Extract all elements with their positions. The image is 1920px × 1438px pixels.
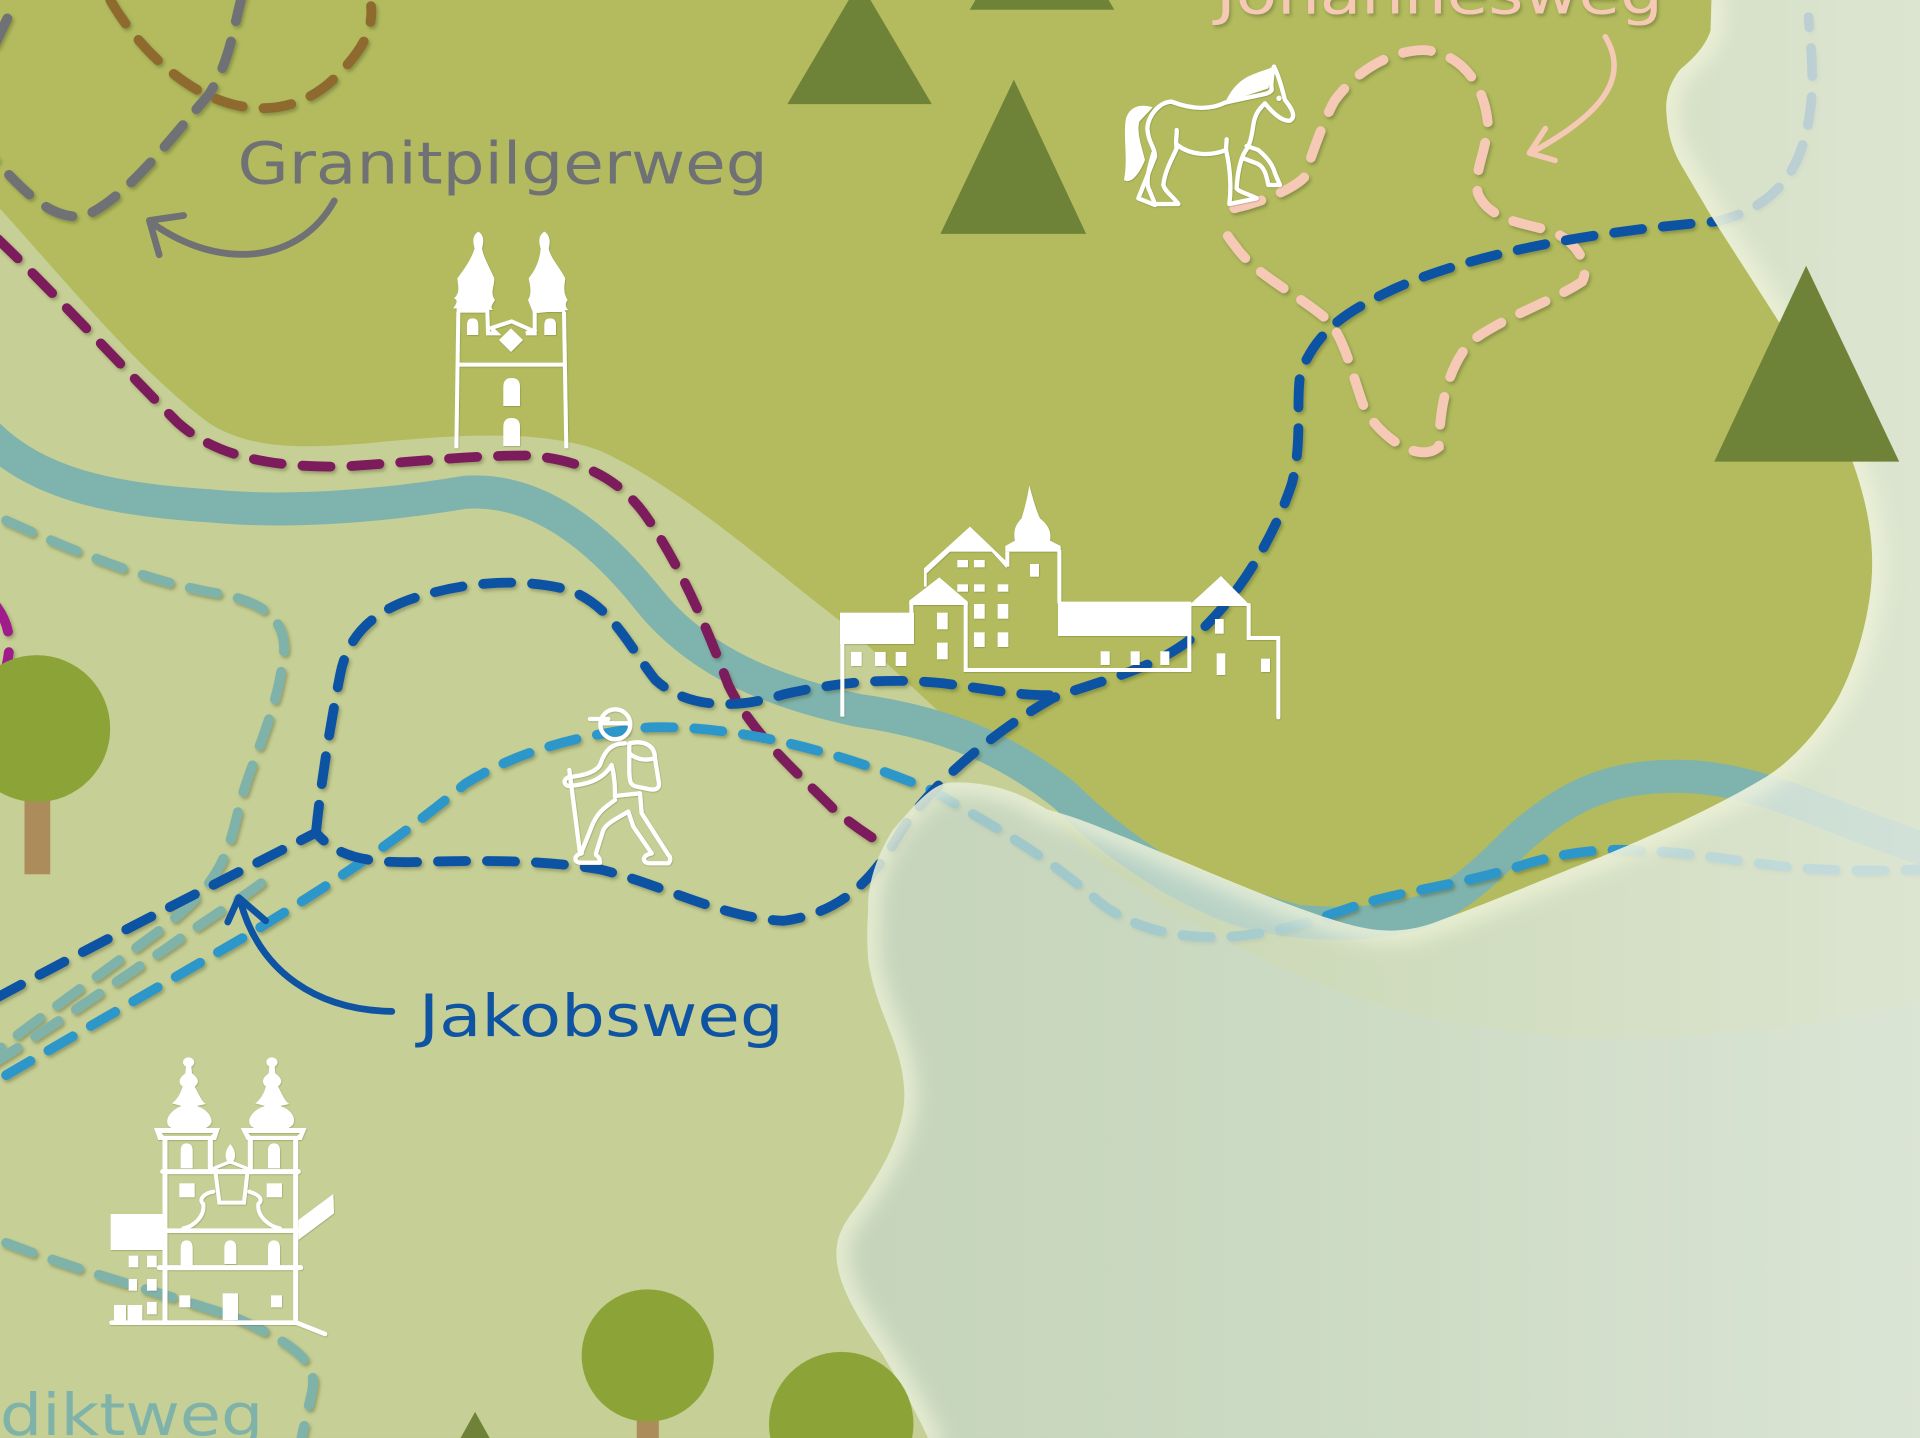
tree: left xyxy=(0,655,110,874)
dark green upland area xyxy=(0,0,1886,941)
label: Jakobsweg: Jakobsweg xyxy=(415,983,784,1050)
tree: bottom centre xyxy=(582,1289,714,1438)
trail: light blue xyxy=(6,727,1920,1075)
backpack xyxy=(629,742,659,790)
conifers xyxy=(457,0,1899,1438)
icon: horse xyxy=(1124,66,1293,205)
fog overlay right side xyxy=(836,0,1920,1438)
tower body xyxy=(456,310,566,448)
trail: Benediktweg (sage) xyxy=(0,520,313,1438)
icon: castle xyxy=(840,485,1278,717)
right cupola xyxy=(249,1057,294,1129)
left spire xyxy=(453,232,495,310)
abbey windows xyxy=(181,1143,193,1168)
label: Granitpilgerweg: Granitpilgerweg xyxy=(238,131,768,198)
trail: magenta xyxy=(0,606,9,667)
trail: grey Granitpilgerweg xyxy=(0,0,242,216)
icon: hiker xyxy=(565,709,670,863)
trail: brown xyxy=(110,0,371,108)
arrow: Granitpilgerweg xyxy=(149,201,334,255)
castle walls xyxy=(842,550,1278,717)
conifer: top 2 xyxy=(970,0,1114,10)
conifer: top 1 xyxy=(787,0,932,104)
trail: maroon xyxy=(0,239,888,847)
hips and legs xyxy=(615,793,668,855)
left cupola xyxy=(167,1057,212,1129)
side wing xyxy=(111,1214,163,1250)
river xyxy=(0,435,1920,923)
conifer: middle xyxy=(940,80,1086,234)
trail: Johannesweg (pink) xyxy=(1224,50,1585,452)
walls and string courses xyxy=(112,1140,325,1334)
upland continuing under the fog xyxy=(1052,810,1397,1008)
right spire xyxy=(528,232,568,313)
walking pole xyxy=(569,770,580,853)
castle windows xyxy=(851,560,1270,675)
conifer: bottom small xyxy=(457,1412,493,1438)
cornices xyxy=(154,1128,220,1140)
icon: baroque twin tower abbey xyxy=(111,1057,334,1334)
arrow: Johannesweg xyxy=(1529,37,1614,160)
castle roofs xyxy=(1005,485,1061,552)
arrow: Jakobsweg xyxy=(228,898,392,1011)
fog body xyxy=(836,0,1920,1438)
icon: twin tower church xyxy=(453,232,568,448)
fog soft glow edge xyxy=(836,0,1872,1438)
horse outline xyxy=(1138,67,1293,205)
trail: Jakobsweg (dark blue) xyxy=(0,17,1812,998)
tree: bottom right xyxy=(769,1352,913,1438)
horse mane and tail xyxy=(1124,66,1274,181)
windows and ornament xyxy=(467,318,478,335)
boots xyxy=(575,853,600,863)
head and cap xyxy=(600,709,630,739)
horse eye xyxy=(1276,96,1282,101)
conifer: right xyxy=(1714,266,1899,462)
torso and arm xyxy=(565,743,625,797)
